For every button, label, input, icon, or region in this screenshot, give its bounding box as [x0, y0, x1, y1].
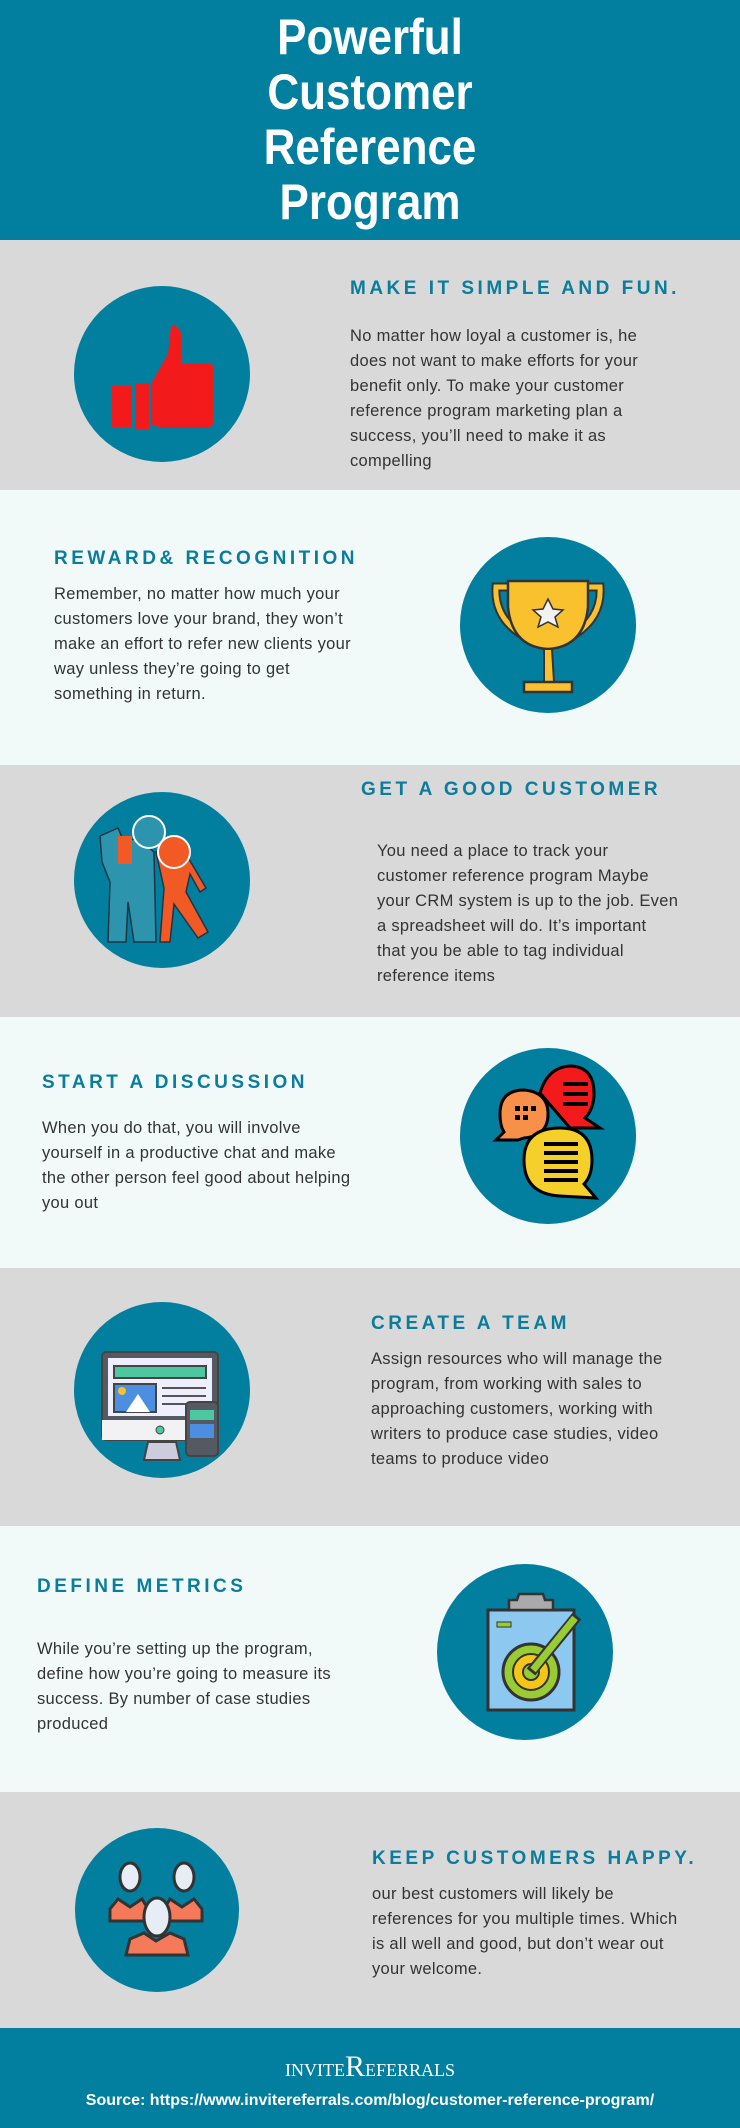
- source: Source: https://www.invitereferrals.com/blog/customer-reference-program/: [86, 2092, 654, 2109]
- text: No matter how loyal a customer is, he: [350, 327, 637, 345]
- heading: CREATE A TEAM: [371, 1313, 570, 1334]
- text: success. By number of case studies: [37, 1690, 310, 1708]
- title: Program: [280, 174, 460, 230]
- footer: [0, 2028, 740, 2128]
- icon: thumbs up: [74, 286, 250, 462]
- icon: group: [75, 1828, 239, 1992]
- text: a spreadsheet will do. It’s important: [377, 917, 646, 935]
- text: way unless they’re going to get: [54, 660, 290, 678]
- title: Powerful: [277, 9, 463, 65]
- heading: KEEP CUSTOMERS HAPPY.: [372, 1848, 697, 1869]
- text: benefit only. To make your customer: [350, 377, 624, 395]
- text: define how you’re going to measure its: [37, 1665, 331, 1683]
- heading: REWARD& RECOGNITION: [54, 548, 358, 569]
- text: Remember, no matter how much your: [54, 585, 340, 603]
- text: customers love your brand, they won’t: [54, 610, 343, 628]
- heading: DEFINE METRICS: [37, 1576, 246, 1597]
- text: is all well and good, but don’t wear out: [372, 1935, 664, 1953]
- text: [372, 1885, 677, 1978]
- panel: discussion: [0, 1017, 740, 1268]
- text: something in return.: [54, 685, 206, 703]
- text: [377, 842, 678, 985]
- panel: define metrics: [0, 1526, 740, 1792]
- text: you out: [42, 1194, 98, 1212]
- text: customer reference program Maybe: [377, 867, 649, 885]
- logo: INVITEREFERRALS: [285, 2050, 455, 2083]
- text: program, from working with sales to: [371, 1375, 642, 1393]
- text: compelling: [350, 452, 432, 470]
- icon: chat bubbles: [460, 1048, 636, 1224]
- text: success, you’ll need to make it as: [350, 427, 606, 445]
- text: our best customers will likely be: [372, 1885, 614, 1903]
- title: [264, 9, 476, 230]
- text: the other person feel good about helping: [42, 1169, 350, 1187]
- text: [54, 585, 351, 703]
- text: writers to produce case studies, video: [371, 1425, 658, 1443]
- text: Assign resources who will manage the: [371, 1350, 662, 1368]
- text: You need a place to track your: [377, 842, 608, 860]
- text: make an effort to refer new clients your: [54, 635, 351, 653]
- text: When you do that, you will involve: [42, 1119, 301, 1137]
- text: [371, 1350, 662, 1468]
- text: your CRM system is up to the job. Even: [377, 892, 678, 910]
- panel: make it simple: [0, 240, 740, 490]
- text: references for you multiple times. Which: [372, 1910, 677, 1928]
- text: [350, 327, 638, 470]
- text: While you’re setting up the program,: [37, 1640, 313, 1658]
- icon: trophy: [460, 537, 636, 713]
- text: your welcome.: [372, 1960, 482, 1978]
- text: [42, 1119, 350, 1212]
- text: yourself in a productive chat and make: [42, 1144, 336, 1162]
- panel: good customer: [0, 765, 740, 1017]
- panel: keep customers happy: [0, 1792, 740, 2028]
- icon: monitor: [74, 1302, 250, 1478]
- panel: create a team: [0, 1268, 740, 1526]
- text: reference program marketing plan a: [350, 402, 622, 420]
- text: reference items: [377, 967, 495, 985]
- panel: reward: [0, 490, 740, 765]
- title: Reference: [264, 119, 476, 175]
- text: does not want to make efforts for your: [350, 352, 638, 370]
- text: produced: [37, 1715, 108, 1733]
- heading: START A DISCUSSION: [42, 1072, 308, 1093]
- heading: GET A GOOD CUSTOMER: [361, 779, 661, 800]
- icon: people: [74, 792, 250, 968]
- title: Customer: [267, 64, 473, 120]
- text: that you be able to tag individual: [377, 942, 624, 960]
- heading: MAKE IT SIMPLE AND FUN.: [350, 278, 680, 299]
- text: approaching customers, working with: [371, 1400, 653, 1418]
- icon: clipboard target: [437, 1564, 613, 1740]
- text: [37, 1640, 331, 1733]
- header: [0, 0, 740, 240]
- text: teams to produce video: [371, 1450, 549, 1468]
